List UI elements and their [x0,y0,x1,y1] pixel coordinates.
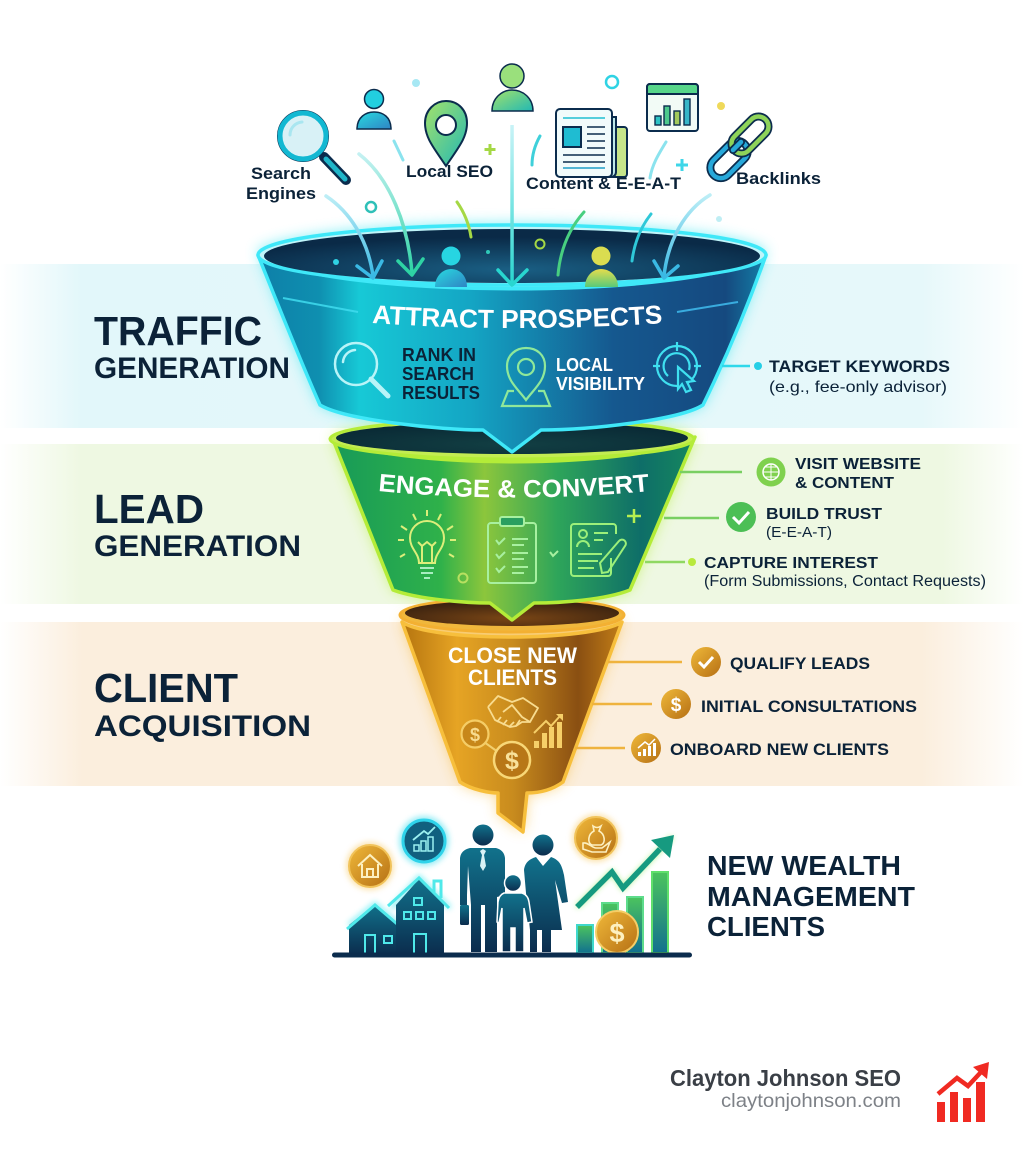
funnel 3: close new clients [400,598,624,832]
icon: person centre [492,64,533,111]
band: traffic generation [0,264,1024,428]
text: rank in search results [402,345,480,403]
icon: outline magnifier [335,343,388,396]
text: rank in search results: SEARCH [402,364,474,384]
callout: visit website and content [680,456,921,492]
icon: large house [388,878,449,955]
icon: chart coin [631,733,661,763]
label: backlinks: Backlinks [736,169,821,188]
heading: lead generation [94,486,301,563]
callout: qualify leads: QUALIFY LEADS [730,655,870,673]
callout: build trust: BUILD TRUST [766,506,882,523]
label: new wealth management clients: CLIENTS [707,911,825,942]
callout: visit website and content: & CONTENT [795,475,894,492]
title: engage and convert: ENGAGE & CONVERT [380,474,648,498]
ground line [332,952,692,958]
icon: small house [347,904,403,955]
label: local seo: Local SEO [406,162,493,181]
label: new wealth management clients: MANAGEMENT [707,881,915,912]
icon: checklist clipboard [488,517,536,583]
callout: build trust [664,502,882,541]
callout: onboard new clients: ONBOARD NEW CLIENTS [670,741,889,759]
heading: client acquisition [94,665,311,743]
icon: form with pencil [571,524,626,576]
decorative sparkles [366,76,725,222]
arrow: search engines [326,196,382,278]
title: attract prospects: ATTRACT PROSPECTS [372,306,662,328]
callout: capture interest [645,555,986,590]
callout: qualify leads [608,647,870,677]
footer: red chart logo [937,1062,989,1122]
icon: dollar coin [596,911,638,953]
band: lead generation [0,444,1024,604]
funnel glows [258,224,766,832]
title: close new clients: CLIENTS [468,665,557,690]
callout: initial consultations [592,689,917,719]
icon: dollar coin [661,689,691,719]
heading: traffic generation: GENERATION [94,352,290,385]
icon: location pin [425,101,467,166]
icon: small dollar coin: $ [470,725,480,745]
callout: capture interest: CAPTURE INTEREST [704,555,878,572]
icon: outline pin with map [502,348,550,406]
heading: traffic generation [94,308,290,385]
footer: brand text: Clayton Johnson SEO [670,1065,901,1091]
icon: woman [524,834,568,952]
funnel mouth [400,598,624,632]
text: local visibility [556,355,645,394]
callout: target keywords: (e.g., fee-only advisor) [769,379,947,396]
icon: large dollar coin: $ [505,747,519,775]
heading: traffic generation: TRAFFIC [94,308,262,354]
icon: large dollar coin [494,742,530,778]
icon: growth bars [577,872,668,953]
callout: build trust: (E-E-A-T) [766,525,832,541]
icon: person in funnel, yellow [585,246,618,287]
arrow: backlinks [654,195,710,278]
callout: capture interest: (Form Submissions, Contact Requests) [704,573,986,590]
icon: browser chart [647,84,698,131]
label: search engines: Engines [246,184,316,203]
title: close new clients [448,643,577,690]
icon: dollar coin: $ [671,695,682,716]
icon: dollar coin: $ [609,918,625,948]
icon: man [460,824,505,952]
icon: money bag coin [572,814,620,862]
icon: handshake [488,696,538,727]
callout: initial consultations: INITIAL CONSULTATIONS [701,698,917,716]
icon: light bulb [398,510,456,578]
icon: child [497,874,532,952]
icon: globe [756,458,786,486]
icon: target cursor [653,342,701,392]
glow behind houses and chart [349,837,672,928]
arrow: second source [359,154,423,275]
heading: lead generation: LEAD [94,486,204,532]
callout: target keywords [722,358,950,396]
text: local visibility: VISIBILITY [556,374,645,394]
dots in mouth [333,240,544,265]
funnel 1: attract prospects [256,223,768,454]
label: search engines [246,164,316,203]
icon: growth arrow [577,835,674,907]
label: content and e-e-a-t: Content & E-E-A-T [526,174,682,193]
icon: chain link [706,112,773,182]
icon: small dollar coin [462,720,498,752]
icon: check coin [691,647,721,677]
illustration: new clients [332,814,692,958]
icon: house coin [346,842,394,890]
flow strokes [394,136,666,275]
footer: brand text: claytonjohnson.com [721,1090,901,1112]
icon: growth chart [534,714,563,748]
funnel mouth [258,225,766,285]
callout: target keywords: TARGET KEYWORDS [769,358,950,376]
heading: lead generation: GENERATION [94,530,301,563]
callout: onboard new clients [575,733,889,763]
heading: client acquisition: ACQUISITION [94,710,311,743]
icon: check [726,502,756,532]
arrow: centre [498,125,527,285]
footer: brand text [670,1065,901,1112]
sparkles in funnel 2 [458,509,641,582]
text: rank in search results: RANK IN [402,345,476,365]
callout: visit website and content: VISIT WEBSITE [795,456,921,473]
funnel mouth [330,419,694,459]
label: new wealth management clients: NEW WEALTH [707,850,901,881]
arrows into funnel [326,125,710,285]
text: local visibility: LOCAL [556,355,613,375]
icon: magnifier [278,111,346,180]
band: client acquisition [0,622,1024,786]
icon: person left [357,90,391,129]
icon: newspaper [556,109,627,177]
heading: client acquisition: CLIENT [94,665,238,711]
label: new wealth management clients [707,850,915,942]
label: search engines: Search [251,164,311,183]
icon: person in funnel, blue [435,246,467,287]
title: close new clients: CLOSE NEW [448,643,577,668]
text: rank in search results: RESULTS [402,383,480,403]
top sources: icons and labels [246,64,821,222]
funnel 2: engage and convert [328,423,697,622]
icon: chart coin teal [399,816,449,866]
